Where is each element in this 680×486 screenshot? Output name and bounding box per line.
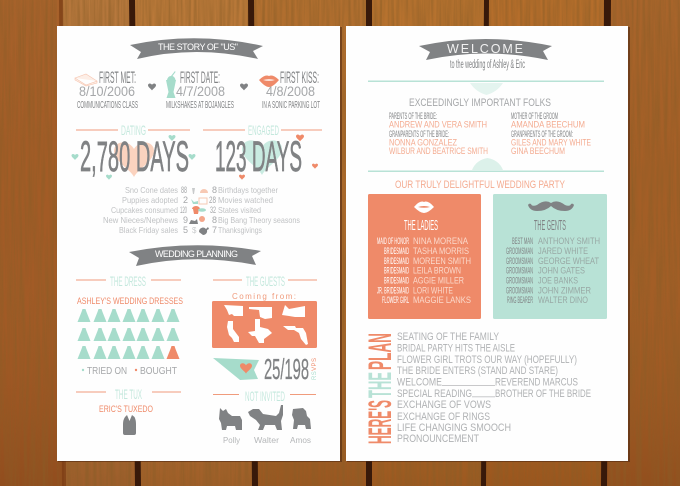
family: groom side: AMANDA BEECHUM bbox=[511, 120, 585, 130]
list: ceremony plan: THE BRIDE ENTERS (STAND AND STARE) bbox=[397, 365, 558, 377]
panel: the ladies: TASHA MORRIS bbox=[413, 246, 469, 256]
stats: right column: 7 bbox=[212, 225, 217, 235]
icon: large peach heart bbox=[114, 142, 154, 177]
text: FIRST MET: bbox=[99, 69, 136, 87]
icon: dog polly: Polly bbox=[223, 435, 241, 445]
rsvp count: 25/198 bbox=[264, 354, 309, 386]
coming from label: Coming from: bbox=[232, 292, 296, 301]
panel: the gents bbox=[493, 194, 607, 319]
panel: the gents: JOHN GATES bbox=[538, 266, 585, 276]
panel: the ladies: THE LADIES bbox=[404, 217, 438, 234]
first date: 4/7/2008 bbox=[176, 84, 225, 99]
dress legend: TRIED ON bbox=[87, 365, 127, 377]
banner: welcome bbox=[419, 39, 552, 60]
list: ceremony plan: SPECIAL READING bbox=[397, 388, 472, 400]
panel: the gents: RING BEARER bbox=[507, 295, 533, 306]
family: bride side: NONNA GONZALEZ bbox=[389, 138, 457, 148]
family: groom side bbox=[511, 111, 591, 156]
rsvp count: RSVPS bbox=[312, 358, 318, 380]
the guests heading: THE GUESTS bbox=[246, 273, 285, 289]
panel: the gents: GEORGE WHEAT bbox=[538, 256, 599, 266]
ornament top bbox=[368, 80, 604, 95]
panel: the ladies: MAID OF HONOR bbox=[377, 236, 409, 247]
stats: left column: Puppies adopted bbox=[122, 195, 178, 205]
banner: wedding planning bbox=[129, 245, 261, 266]
panel: the ladies: BRIDESMAID bbox=[384, 246, 409, 257]
banner: wedding planning: WEDDING PLANNING bbox=[155, 249, 238, 259]
dresses title: ASHLEY'S WEDDING DRESSES bbox=[77, 296, 183, 306]
text: FIRST KISS: bbox=[280, 69, 319, 87]
pictogram: dresses bbox=[78, 309, 180, 359]
panel: the gents: GROOMSMAN bbox=[506, 256, 533, 267]
list: ceremony plan: SEATING OF THE FAMILY bbox=[397, 331, 500, 343]
list: ceremony plan: WELCOME bbox=[397, 376, 442, 388]
family: groom side: GRANPARENTS OF THE GROOM: bbox=[511, 129, 573, 140]
panel: the gents: ANTHONY SMITH bbox=[538, 236, 600, 246]
state: washington bbox=[282, 305, 305, 317]
first met bbox=[75, 69, 138, 111]
text: IN A SONIC PARKING LOT bbox=[262, 99, 320, 111]
list: ceremony plan: REVEREND MARCUS bbox=[495, 376, 578, 388]
stats: left column: Black Friday sales bbox=[119, 225, 178, 235]
stats: left column: 88 bbox=[181, 185, 187, 195]
panel: the ladies: BRIDESMAID bbox=[384, 266, 409, 276]
first kiss bbox=[259, 69, 320, 111]
stats: left column: New Nieces/Nephews bbox=[103, 215, 178, 225]
list: ceremony plan: EXCHANGE OF VOWS bbox=[397, 399, 491, 411]
stats: right column: States visited bbox=[218, 205, 261, 215]
list: ceremony plan: FLOWER GIRL TROTS OUR WAY (HOPEFULLY) bbox=[397, 354, 577, 366]
icon: heart divider 2 bbox=[240, 83, 248, 90]
panel: the ladies: NINA MORENA bbox=[413, 236, 468, 246]
dress legend bbox=[82, 365, 177, 377]
state: california bbox=[227, 321, 239, 342]
family: bride side: WILBUR AND BEATRICE SMITH bbox=[389, 146, 488, 156]
first date: FIRST DATE: bbox=[180, 69, 220, 87]
list: ceremony plan: LIFE CHANGING SMOOCH bbox=[397, 422, 511, 434]
text: PLAN bbox=[362, 333, 398, 370]
panel: the ladies: LORI WHITE bbox=[413, 286, 453, 296]
panel: the gents: WALTER DINO bbox=[538, 295, 588, 305]
list: ceremony plan: EXCHANGE OF RINGS bbox=[397, 411, 490, 423]
panel: the gents: GROOMSMAN bbox=[506, 246, 533, 257]
list: ceremony plan bbox=[397, 331, 591, 445]
family: bride side: GRANPARENTS OF THE BRIDE: bbox=[389, 129, 449, 140]
rsvp count bbox=[264, 354, 318, 386]
text: MILKSHAKES AT BOJANGLES bbox=[166, 99, 234, 111]
panel: the ladies: LEILA BROWN bbox=[413, 266, 461, 276]
heading: wedding party: OUR TRULY DELIGHTFUL WEDDING PARTY bbox=[395, 179, 565, 191]
family: bride side bbox=[389, 111, 488, 156]
text: to the wedding of Ashley & Eric bbox=[450, 59, 525, 71]
family: groom side: MOTHER OF THE GROOM bbox=[511, 111, 558, 122]
right card bbox=[346, 26, 630, 462]
panel: the gents: GROOMSMAN bbox=[506, 266, 533, 276]
panel: the ladies: AGGIE MILLER bbox=[413, 276, 464, 286]
panel: the ladies: MAGGIE LANKS bbox=[413, 295, 471, 305]
stats: right column bbox=[209, 185, 300, 235]
icon: dog polly bbox=[219, 408, 242, 445]
dating counter bbox=[72, 122, 196, 181]
left card bbox=[57, 26, 342, 462]
heading: important folks: EXCEEDINGLY IMPORTANT FOLKS bbox=[409, 97, 551, 109]
list: ceremony plan: BRIDAL PARTY HITS THE AISLE bbox=[397, 342, 515, 354]
state: montana bbox=[224, 305, 243, 316]
panel: the gents: GROOMSMAN bbox=[506, 286, 533, 296]
panel: the gents: THE GENTS bbox=[534, 217, 566, 234]
family: bride side: PARENTS OF THE BRIDE: bbox=[389, 111, 437, 122]
icon: large mint heart bbox=[242, 140, 282, 175]
banner: the story of us bbox=[130, 38, 263, 59]
vertical title: here's the plan: HERE'S bbox=[362, 400, 398, 444]
panel: the gents: JOHN ZIMMER bbox=[538, 286, 591, 296]
stats: left column bbox=[103, 185, 188, 235]
dating counter: DATING bbox=[121, 122, 146, 138]
icon: dog walter bbox=[248, 405, 283, 445]
list: ceremony plan: BROTHER OF THE BRIDE bbox=[495, 388, 591, 400]
stats: right column: Birthdays together bbox=[218, 185, 278, 195]
dress legend: BOUGHT bbox=[140, 365, 177, 377]
not invited heading: NOT INVITED bbox=[245, 388, 285, 404]
panel: the ladies: BRIDESMAID bbox=[384, 256, 409, 267]
icon: lips white bbox=[414, 202, 434, 213]
panel: the ladies bbox=[368, 194, 481, 319]
family: bride side: ANDREW AND VERA SMITH bbox=[389, 120, 487, 130]
tux title: ERIC'S TUXEDO bbox=[99, 404, 153, 414]
first met: 8/10/2006 bbox=[79, 84, 135, 99]
icon: lips bbox=[259, 76, 279, 87]
the guests heading bbox=[213, 273, 317, 289]
the tux heading: THE TUX bbox=[115, 386, 142, 402]
panel: the gents: GROOMSMAN bbox=[506, 276, 533, 286]
stats: left column: 9 bbox=[183, 215, 188, 225]
stats: icons: $ bbox=[192, 226, 197, 235]
icon: tuxedo bbox=[123, 415, 136, 435]
stats: right column: 8 bbox=[212, 185, 217, 195]
stats: right column: 32 bbox=[210, 205, 216, 215]
panel: the ladies: MOREEN SMITH bbox=[413, 256, 471, 266]
family: groom side: GILES AND MARY WHITE bbox=[511, 138, 591, 148]
ornament bottom bbox=[368, 158, 604, 172]
stats: right column: Big Bang Theory seasons bbox=[218, 215, 300, 225]
stats: left column: 5 bbox=[183, 225, 188, 235]
state: florida bbox=[283, 326, 308, 345]
icon: mustache bbox=[528, 201, 574, 211]
stats: right column: Movies watched bbox=[218, 195, 273, 205]
panel: the ladies: FLOWER GIRL bbox=[382, 295, 409, 306]
icon: paper plane with heart bbox=[213, 358, 259, 380]
text: COMMUNICATIONS CLASS bbox=[77, 99, 138, 111]
panel: the gents: BEST MAN bbox=[512, 236, 533, 247]
stats: left column: 120 bbox=[180, 205, 187, 215]
engaged counter: ENGAGED bbox=[248, 122, 279, 138]
state: texas bbox=[248, 319, 272, 343]
stats: right column: Thanksgivings bbox=[218, 225, 262, 235]
first date bbox=[166, 69, 234, 111]
icon: milkshake bbox=[166, 71, 176, 98]
icon: dog amos bbox=[290, 408, 311, 445]
banner: welcome: WELCOME bbox=[447, 42, 523, 56]
stats: right column: 8 bbox=[212, 215, 217, 225]
state: oklahoma bbox=[249, 307, 272, 319]
panel: states map bbox=[212, 301, 317, 348]
first kiss: 4/8/2008 bbox=[266, 84, 315, 99]
engaged counter bbox=[203, 122, 322, 181]
vertical title: here's the plan: THE bbox=[362, 372, 398, 398]
icon: dog walter: Walter bbox=[254, 435, 279, 445]
the dress heading bbox=[76, 273, 181, 289]
list: ceremony plan: PRONOUNCEMENT bbox=[397, 433, 479, 445]
not invited heading bbox=[213, 388, 316, 404]
text: 2,780 DAYS bbox=[80, 133, 189, 181]
panel: the gents: JARED WHITE bbox=[538, 246, 588, 256]
icon: book bbox=[75, 74, 97, 86]
stats: left column: Cupcakes consumed bbox=[111, 205, 178, 215]
banner: the story of us: THE STORY OF "US" bbox=[158, 42, 238, 52]
the dress heading: THE DRESS bbox=[110, 273, 146, 289]
stats: left column: 2 bbox=[183, 195, 188, 205]
the tux heading bbox=[76, 386, 181, 402]
panel: the ladies: BRIDESMAID bbox=[384, 276, 409, 286]
stats: right column: 28 bbox=[209, 195, 216, 205]
icon: heart divider 1 bbox=[148, 83, 156, 90]
stats: icons bbox=[189, 188, 209, 235]
engaged counter: 123 DAYS bbox=[215, 133, 302, 181]
family: groom side: GINA BEECHUM bbox=[511, 146, 565, 156]
panel: the ladies: JR. BRIDESMAID bbox=[377, 286, 409, 296]
stats: left column: Sno Cone dates bbox=[125, 185, 178, 195]
panel: the gents: JOE BANKS bbox=[538, 276, 578, 286]
icon: dog amos: Amos bbox=[290, 435, 311, 445]
